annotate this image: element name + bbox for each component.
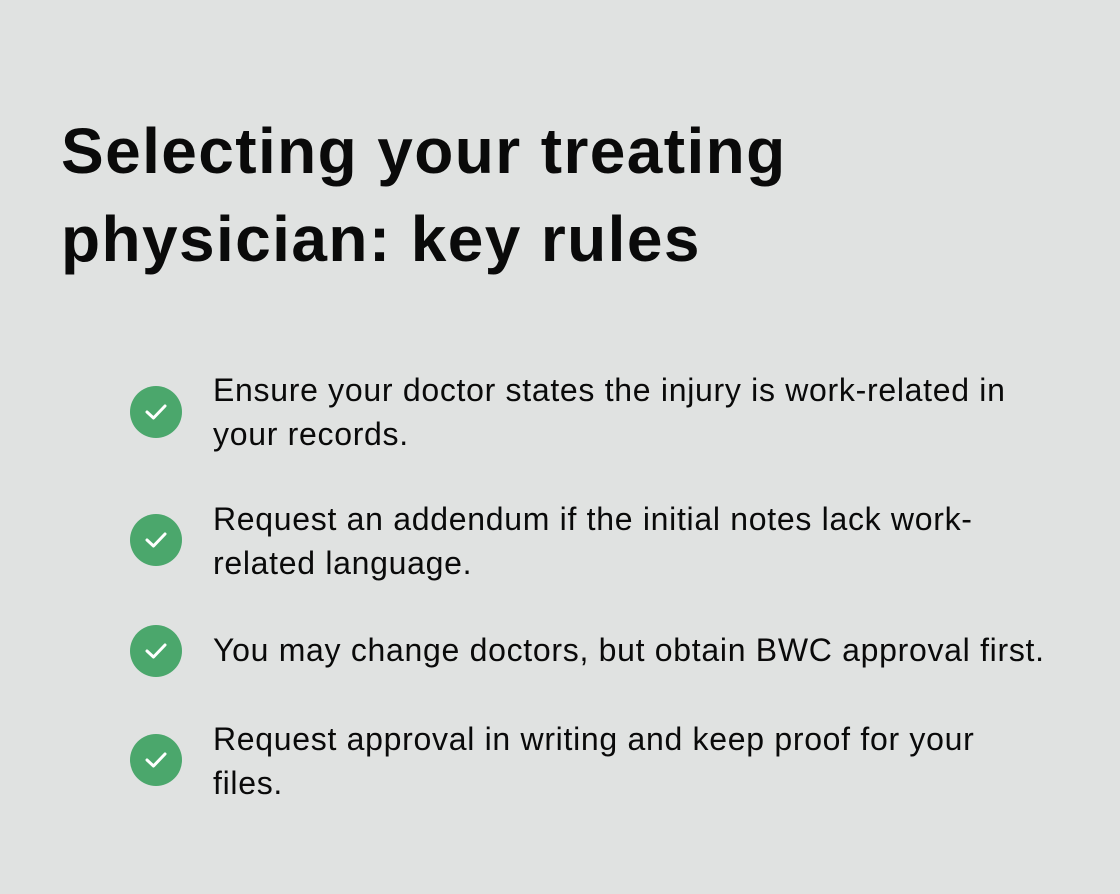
text 1: your records.	[213, 416, 409, 452]
text 1	[213, 372, 1006, 452]
title	[61, 115, 787, 275]
text 4: Request approval in writing and keep proof for your	[213, 721, 974, 757]
text 2	[213, 501, 973, 581]
icon: check	[130, 734, 182, 786]
text 2: related language.	[213, 545, 472, 581]
text 4: files.	[213, 765, 283, 801]
text 2: Request an addendum if the initial notes lack work-	[213, 501, 973, 537]
item 4	[130, 721, 974, 801]
title: Selecting your treating	[61, 115, 787, 187]
icon: check	[130, 386, 182, 438]
text 4	[213, 721, 974, 801]
item 3	[130, 625, 1045, 677]
text 3: You may change doctors, but obtain BWC approval first.	[213, 632, 1045, 668]
icon: check	[130, 514, 182, 566]
title: physician: key rules	[61, 203, 701, 275]
icon: check	[130, 625, 182, 677]
item 2	[130, 501, 973, 581]
text 1: Ensure your doctor states the injury is work-related in	[213, 372, 1006, 408]
item 1	[130, 372, 1006, 452]
